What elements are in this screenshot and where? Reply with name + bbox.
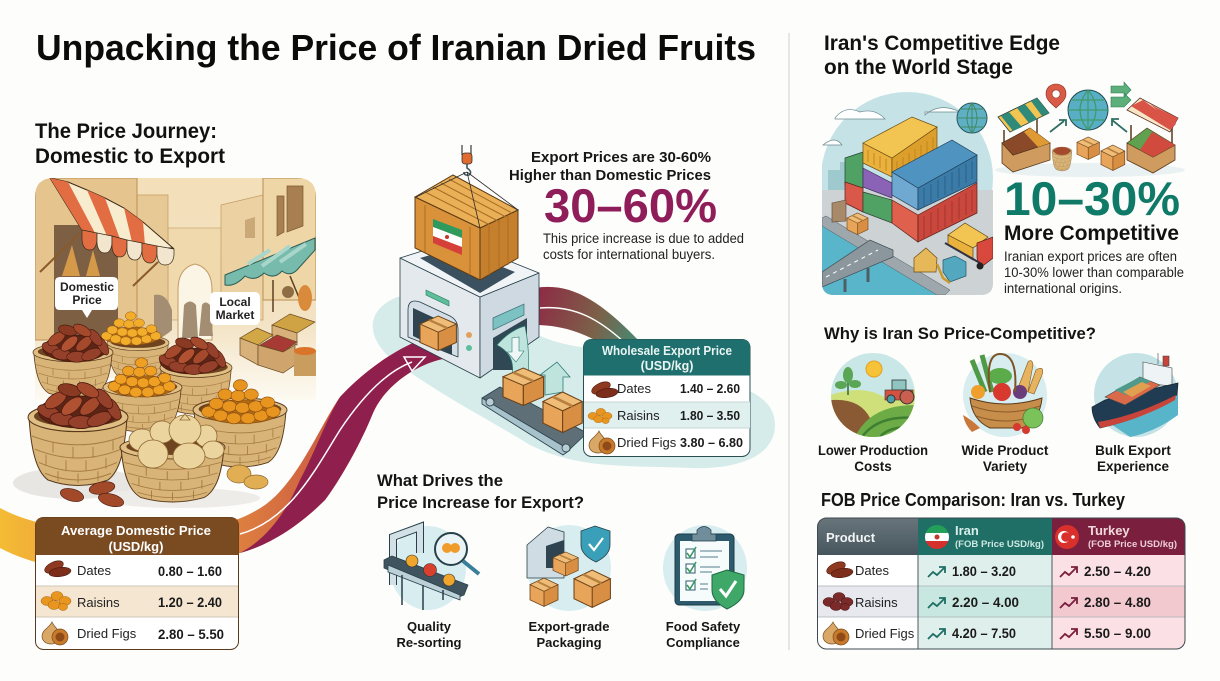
big stat: 10-30%: 10–30%	[1004, 172, 1180, 225]
text block: export price headline: Higher than Domestic Prices	[509, 167, 711, 184]
text block: competitive explanation: international origins.	[1004, 281, 1122, 296]
table header: average domestic price: (USD/kg)	[109, 539, 163, 554]
icon: wide product variety	[963, 353, 1047, 437]
icon: quality re-sorting	[384, 526, 479, 610]
ribbon highlight arrow	[240, 357, 425, 534]
port illustration	[821, 92, 993, 295]
row: raisins: 1.20 – 2.40	[158, 595, 222, 610]
header: product: Product	[826, 530, 876, 545]
row: raisins: Raisins	[77, 595, 120, 610]
callout: local market: Market	[216, 308, 254, 322]
icon: export-grade packaging	[527, 525, 611, 611]
text block: competitive explanation: Iranian export prices are often	[1004, 249, 1177, 264]
label: food safety compliance: Food Safety	[666, 619, 741, 634]
icon: bulk export experience	[1092, 353, 1178, 437]
heading: the price journey: Domestic to Export	[35, 144, 225, 168]
callout: domestic price	[55, 277, 118, 318]
row: dates: 1.80 – 3.20	[952, 564, 1016, 579]
divider	[788, 33, 790, 650]
row: dates: Dates	[617, 381, 651, 396]
export ribbon behind factory	[535, 287, 640, 352]
text block: price increase explanation: This price increase is due to added	[543, 231, 744, 246]
icon: food safety compliance	[663, 525, 747, 611]
callout: domestic price: Domestic	[60, 280, 114, 294]
wicker basket	[1052, 147, 1072, 171]
row: dried figs: Dried Figs	[855, 626, 915, 641]
header: iran: (FOB Price USD/kg)	[955, 539, 1044, 550]
row: dried figs: 3.80 – 6.80	[680, 435, 743, 450]
callout: local market: Local	[219, 295, 251, 309]
label: bulk export experience: Bulk Export	[1095, 443, 1171, 458]
label: lower production costs: Lower Production	[818, 443, 928, 458]
processing factory illustration	[400, 240, 539, 378]
label: wide product variety: Variety	[983, 459, 1028, 474]
label: food safety compliance: Compliance	[666, 635, 740, 650]
subheading: more competitive: More Competitive	[1004, 221, 1179, 245]
market scene illustration	[35, 178, 316, 400]
label: bulk export experience: Experience	[1097, 459, 1170, 474]
label: export-grade packaging: Export-grade	[529, 619, 609, 634]
row: dried figs	[823, 622, 1151, 645]
label: bulk export experience	[1095, 443, 1171, 474]
Iranian flag on container	[433, 219, 462, 255]
row: dates	[43, 558, 222, 579]
header: turkey	[1055, 523, 1177, 550]
row: raisins: 2.80 – 4.80	[1084, 595, 1151, 610]
table: wholesale export price	[584, 340, 750, 456]
row: raisins	[41, 592, 222, 610]
table header: average domestic price	[61, 523, 211, 554]
header: turkey: (FOB Price USD/kg)	[1088, 539, 1177, 550]
icon: green exchange arrows	[1111, 82, 1131, 107]
price journey ribbon	[0, 330, 455, 573]
heading: the price journey	[35, 119, 225, 168]
text block: export price headline	[509, 149, 711, 184]
teal background blob behind export path	[373, 295, 775, 468]
table header: wholesale export price: (USD/kg)	[641, 359, 693, 373]
cartons	[1077, 137, 1125, 170]
right market stall	[1127, 98, 1178, 173]
row: dried figs	[42, 622, 224, 645]
white ground under baskets	[18, 375, 282, 515]
header: turkey: Turkey	[1088, 523, 1130, 538]
row: dried figs: 4.20 – 7.50	[952, 626, 1016, 641]
heading: the price journey: The Price Journey:	[35, 119, 217, 143]
arrows toward globe	[1050, 119, 1127, 132]
big stat: 30-60%: 30–60%	[544, 179, 717, 232]
row: dates: 0.80 – 1.60	[158, 564, 222, 579]
row: raisins	[588, 408, 740, 424]
conveyor belt with boxes	[482, 362, 587, 455]
table: average domestic price	[36, 518, 238, 650]
label: food safety compliance	[666, 619, 741, 650]
header: iran	[925, 525, 1044, 549]
heading: FOB price comparison: FOB Price Comparison: Iran vs. Turkey	[821, 490, 1125, 510]
row: dates: Dates	[855, 563, 889, 578]
heading: why is iran so price-competitive: Why is Iran So Price-Competitive?	[824, 324, 1096, 343]
row: dates: Dates	[77, 563, 111, 578]
global market illustration	[995, 82, 1185, 177]
table: FOB price comparison	[818, 518, 1185, 649]
icon: map pin	[1046, 84, 1066, 108]
title: Unpacking the Price of Iranian Dried Fruits	[36, 27, 756, 68]
row: dried figs: 2.80 – 5.50	[158, 627, 224, 642]
row: raisins: 1.80 – 3.50	[680, 408, 740, 423]
table header: average domestic price: Average Domestic Price	[61, 523, 211, 538]
text block: competitive explanation: 10-30% lower than comparable	[1004, 265, 1184, 280]
row: dried figs: 5.50 – 9.00	[1084, 626, 1151, 641]
heading: what drives the price increase: Price Increase for Export?	[377, 493, 584, 512]
table header: wholesale export price: Wholesale Export Price	[602, 344, 732, 358]
label: export-grade packaging	[529, 619, 609, 650]
text block: competitive explanation	[1004, 249, 1184, 296]
heading: competitive edge: on the World Stage	[824, 55, 1013, 79]
icon: lower production costs	[831, 353, 915, 437]
row: raisins	[823, 592, 1151, 610]
text block: export price headline: Export Prices are 30-60%	[531, 149, 711, 166]
row: dried figs	[589, 431, 743, 454]
label: quality re-sorting: Re-sorting	[396, 635, 462, 650]
heading: competitive edge	[824, 31, 1060, 79]
baskets of dried fruit	[13, 312, 287, 509]
callout: local market	[210, 292, 260, 325]
left market stall	[998, 98, 1050, 172]
row: dried figs: Dried Figs	[77, 626, 137, 641]
row: raisins: Raisins	[855, 595, 898, 610]
shipping container with flag and crane hook	[415, 145, 518, 280]
label: export-grade packaging: Packaging	[536, 635, 602, 650]
label: quality re-sorting	[396, 619, 462, 650]
row: dates: 1.40 – 2.60	[680, 381, 740, 396]
icon: globe	[1068, 90, 1108, 130]
row: dates	[825, 559, 1151, 579]
heading: competitive edge: Iran's Competitive Edge	[824, 31, 1060, 55]
row: raisins: 2.20 – 4.00	[952, 595, 1019, 610]
heading: what drives the price increase: What Drives the	[377, 471, 503, 490]
row: raisins: Raisins	[617, 408, 660, 423]
heading: what drives the price increase	[377, 471, 584, 512]
label: wide product variety	[962, 443, 1049, 474]
row: dates: 2.50 – 4.20	[1084, 564, 1151, 579]
text block: price increase explanation: costs for international buyers.	[543, 247, 715, 262]
label: lower production costs: Costs	[854, 459, 892, 474]
text block: price increase explanation	[543, 231, 744, 262]
label: lower production costs	[818, 443, 928, 474]
label: wide product variety: Wide Product	[962, 443, 1049, 458]
label: quality re-sorting: Quality	[407, 619, 452, 634]
row: dates	[590, 379, 740, 399]
header: iran: Iran	[955, 523, 979, 538]
row: dried figs: Dried Figs	[617, 435, 677, 450]
callout: domestic price: Price	[72, 293, 102, 307]
table header: wholesale export price	[602, 344, 732, 373]
